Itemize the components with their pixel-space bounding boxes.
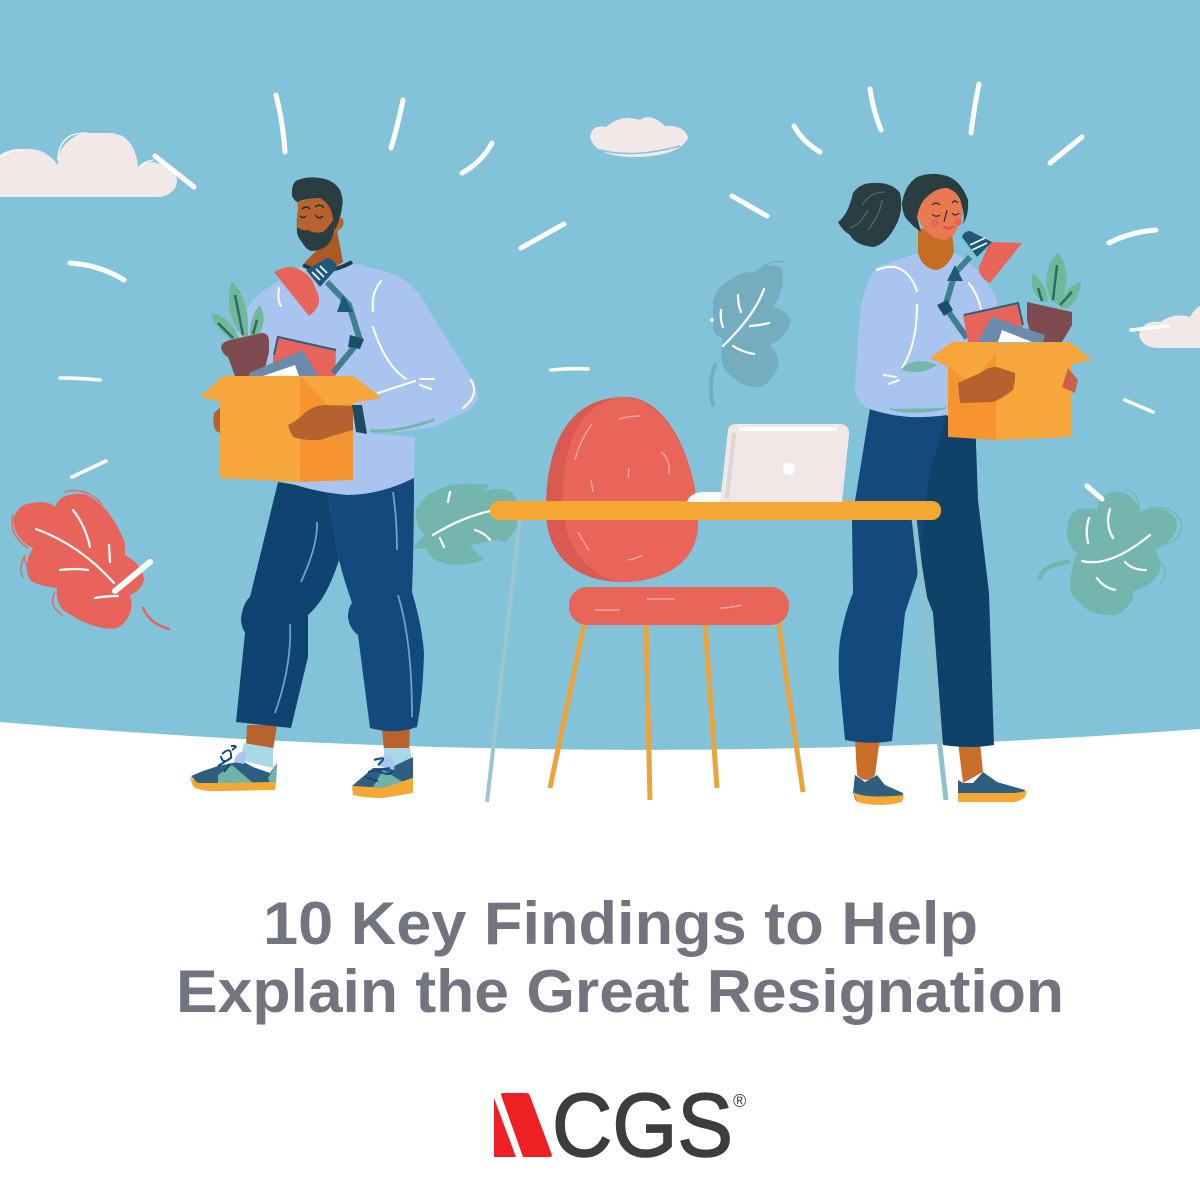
leaf: faded green-blue — [710, 261, 791, 405]
woman: ponytail — [838, 183, 901, 247]
man: beard — [297, 220, 334, 251]
man: neck and head — [292, 177, 352, 270]
CGS logo: ® — [733, 1091, 746, 1111]
leaf: green right — [1040, 486, 1182, 616]
man: notebooks — [249, 336, 336, 376]
woman: arm and hands — [958, 367, 1078, 403]
man: sweater — [235, 263, 478, 495]
woman: head — [902, 174, 968, 240]
woman: sweater — [855, 252, 997, 417]
title: Explain the Great Resignation — [176, 958, 1064, 1025]
CGS logo: CGS — [552, 1076, 733, 1176]
woman: cardboard box — [930, 342, 1092, 440]
woman: desk lamp — [937, 231, 1022, 338]
leaf: monstera behind desk — [413, 484, 524, 565]
woman: left shoe — [853, 775, 904, 805]
woman: notebooks — [963, 303, 1045, 342]
man: sweater folds — [278, 281, 474, 431]
woman: plant — [1027, 252, 1081, 342]
desk leg: left — [487, 518, 520, 802]
cloud: top centre — [590, 117, 688, 157]
woman: right shoe — [958, 772, 1027, 802]
man: left hand — [213, 405, 232, 434]
man: hair — [292, 177, 343, 230]
chair — [546, 397, 803, 800]
man: left shoe — [190, 746, 277, 791]
burst rays — [60, 84, 1168, 477]
woman: neck and chest — [918, 228, 954, 270]
cloud: top left — [0, 133, 177, 197]
man: trousers — [236, 478, 424, 731]
title — [176, 890, 1064, 1025]
figure: man carrying box — [190, 177, 478, 798]
man: cardboard box — [200, 376, 382, 482]
man: legs and socks — [240, 725, 412, 774]
desk leg: right — [914, 518, 946, 800]
man: arm and hand — [288, 405, 367, 440]
figure: woman carrying box — [838, 174, 1092, 805]
woman: trousers — [839, 408, 994, 747]
laptop — [687, 424, 849, 502]
desk top — [490, 501, 941, 520]
title: 10 Key Findings to Help — [263, 890, 978, 957]
man: plant — [211, 281, 269, 376]
cloud: right — [1139, 306, 1200, 348]
woman: legs — [855, 738, 983, 783]
sky background — [0, 0, 1200, 750]
woman: sweater folds — [877, 267, 981, 412]
man: right shoe — [352, 755, 413, 798]
man: desk lamp — [274, 258, 364, 373]
leaf: red — [12, 490, 169, 629]
